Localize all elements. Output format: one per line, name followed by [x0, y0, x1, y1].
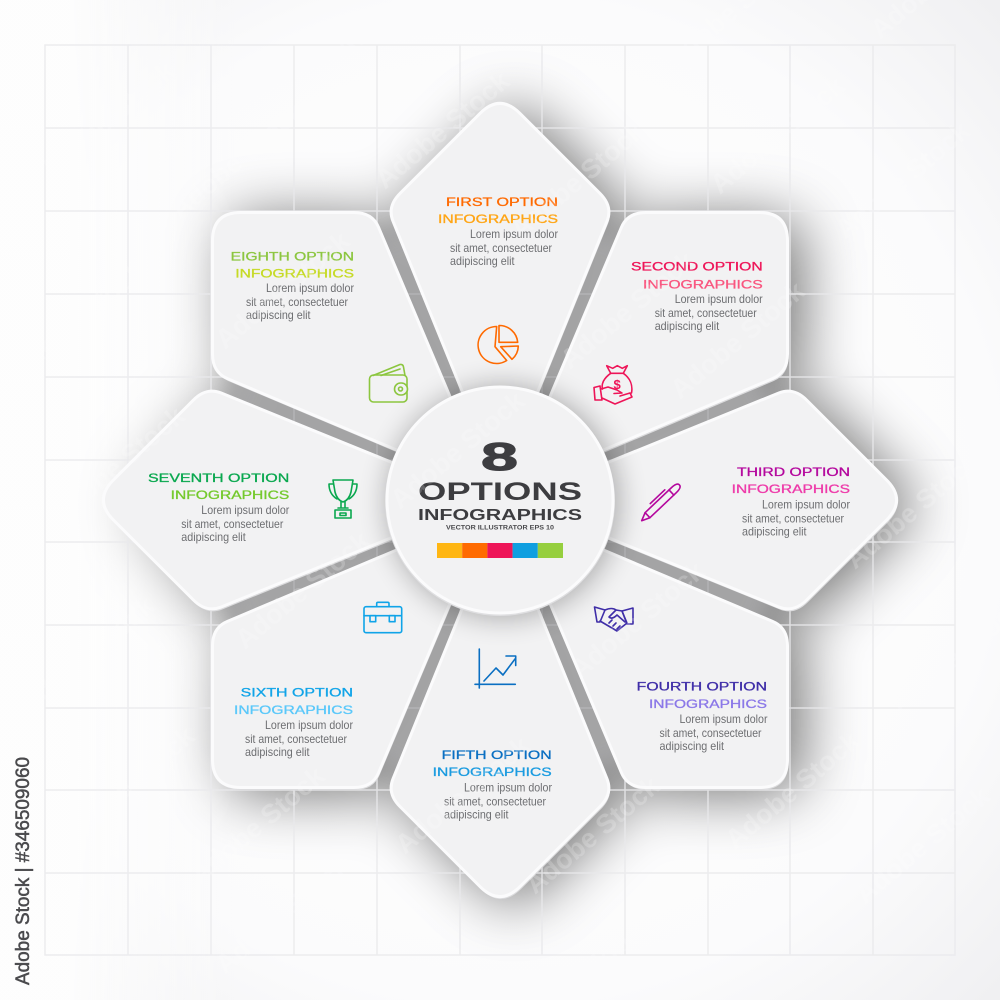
watermark pattern: Adobe Stock — [505, 115, 651, 245]
color bar — [437, 543, 563, 558]
heading: fifth option: FIFTH OPTION — [442, 748, 552, 762]
text block: second option: Lorem ipsum dolor — [675, 292, 763, 306]
text block: third option: Lorem ipsum dolor — [762, 498, 850, 512]
watermark pattern: Adobe Stock — [555, 245, 701, 375]
icon: trophy — [329, 480, 357, 518]
watermark pattern: Adobe Stock — [665, 275, 811, 405]
text block: second option: sit amet, consectetuer — [655, 306, 757, 320]
watermark pattern: Adobe Stock — [385, 385, 531, 515]
fade of the shadow on the lit left side — [0, 0, 235, 1000]
text block: third option — [742, 498, 850, 539]
text block: fourth option — [660, 712, 768, 753]
watermark pattern: Adobe Stock — [830, 115, 976, 245]
subheading: eighth option: INFOGRAPHICS — [235, 266, 354, 280]
watermark pattern: Adobe Stock — [520, 770, 666, 900]
watermark pattern: Adobe Stock — [5, 255, 151, 385]
text block: eighth option: adipiscing elit — [246, 308, 311, 322]
watermark pattern: Adobe Stock — [720, 725, 866, 855]
subheading: sixth option: INFOGRAPHICS — [234, 703, 353, 717]
center circle shadow — [387, 386, 619, 618]
text block: second option — [655, 292, 763, 333]
icon: money bag in hand: $ — [614, 377, 622, 392]
watermark pattern: Adobe Stock — [565, 555, 711, 685]
text block: fourth option: adipiscing elit — [660, 739, 725, 753]
heading: first option: FIRST OPTION — [446, 195, 558, 209]
text block: sixth option: sit amet, consectetuer — [245, 732, 347, 746]
text block: sixth option — [245, 718, 353, 759]
heading: eighth option: EIGHTH OPTION — [231, 249, 354, 263]
icon: growth chart — [475, 649, 516, 688]
panel: sixth option — [143, 480, 521, 860]
text block: first option — [450, 227, 558, 268]
watermark pattern: Adobe Stock — [230, 525, 376, 655]
watermark pattern: Adobe Stock — [185, 760, 331, 890]
soft shadow of the flower shape — [117, 109, 911, 903]
subheading: third option: INFOGRAPHICS — [732, 482, 850, 496]
watermark pattern: Adobe Stock — [55, 720, 201, 850]
title: options: OPTIONS — [418, 478, 582, 506]
text block: seventh option — [181, 503, 289, 544]
watermark pattern: Adobe Stock — [565, 865, 711, 995]
panel: third option — [580, 391, 898, 611]
text block: fifth option: adipiscing elit — [444, 808, 509, 822]
panel: eighth option — [143, 143, 521, 523]
text block: second option: adipiscing elit — [655, 319, 720, 333]
watermark pattern: Adobe Stock — [850, 780, 996, 910]
panel: fifth option — [391, 580, 610, 899]
text block: third option: sit amet, consectetuer — [742, 512, 844, 526]
panel: fourth option — [480, 480, 858, 860]
text block: fifth option: sit amet, consectetuer — [444, 795, 546, 809]
watermark pattern: Adobe Stock — [210, 850, 356, 980]
panel: second option — [480, 143, 858, 523]
text block: sixth option: adipiscing elit — [245, 745, 310, 759]
subtitle: infographics: INFOGRAPHICS — [418, 507, 582, 524]
gap tone between panels — [212, 212, 788, 788]
subheading: seventh option: INFOGRAPHICS — [171, 488, 289, 502]
watermark pattern: Adobe Stock — [165, 95, 311, 225]
text block: fifth option — [444, 781, 552, 822]
watermark pattern: Adobe Stock — [35, 55, 181, 185]
heading: fourth option: FOURTH OPTION — [637, 680, 767, 694]
watermark pattern: Adobe Stock — [15, 590, 161, 720]
text block: sixth option: Lorem ipsum dolor — [265, 718, 353, 732]
icon: money bag in hand — [594, 366, 632, 404]
subheading: fifth option: INFOGRAPHICS — [433, 765, 552, 779]
watermark pattern: Adobe Stock — [705, 70, 851, 200]
text block: seventh option: Lorem ipsum dolor — [201, 503, 289, 517]
panel: first option — [391, 103, 610, 423]
text block: third option: adipiscing elit — [742, 525, 807, 539]
subheading: second option: INFOGRAPHICS — [643, 277, 763, 291]
icon: pen — [637, 480, 682, 523]
caption: VECTOR ILLUSTRATOR EPS 10 — [446, 526, 555, 532]
watermark pattern: Adobe Stock — [390, 730, 536, 860]
text block: fifth option: Lorem ipsum dolor — [464, 781, 552, 795]
text block: eighth option: Lorem ipsum dolor — [266, 281, 354, 295]
heading: seventh option: SEVENTH OPTION — [148, 471, 289, 485]
icon: handshake — [594, 607, 633, 631]
icon: wallet — [370, 364, 408, 402]
subheading: first option: INFOGRAPHICS — [438, 212, 558, 226]
title number: 8 — [481, 436, 518, 479]
heading: sixth option: SIXTH OPTION — [241, 686, 353, 700]
watermark pattern: Adobe Stock — [840, 445, 986, 575]
heading: second option: SECOND OPTION — [631, 260, 763, 274]
watermark pattern: Adobe Stock — [45, 400, 191, 530]
text block: first option: adipiscing elit — [450, 254, 515, 268]
text block: seventh option: sit amet, consectetuer — [181, 517, 283, 531]
icon: pie chart — [478, 325, 518, 363]
text block: eighth option: sit amet, consectetuer — [246, 295, 348, 309]
heading: third option: THIRD OPTION — [737, 465, 850, 479]
text block: fourth option: Lorem ipsum dolor — [680, 712, 768, 726]
stock id label: Adobe Stock | #346509060 — [13, 757, 34, 985]
subheading: fourth option: INFOGRAPHICS — [649, 697, 767, 711]
text block: seventh option: adipiscing elit — [181, 530, 246, 544]
watermark pattern: Adobe Stock — [210, 225, 356, 355]
text block: first option: sit amet, consectetuer — [450, 241, 552, 255]
text block: fourth option: sit amet, consectetuer — [660, 726, 762, 740]
text block: eighth option — [246, 281, 354, 322]
panel: seventh option — [103, 391, 421, 611]
center circle — [385, 386, 615, 616]
watermark pattern: Adobe Stock — [370, 65, 516, 195]
icon: briefcase — [364, 602, 402, 633]
text block: first option: Lorem ipsum dolor — [470, 227, 558, 241]
